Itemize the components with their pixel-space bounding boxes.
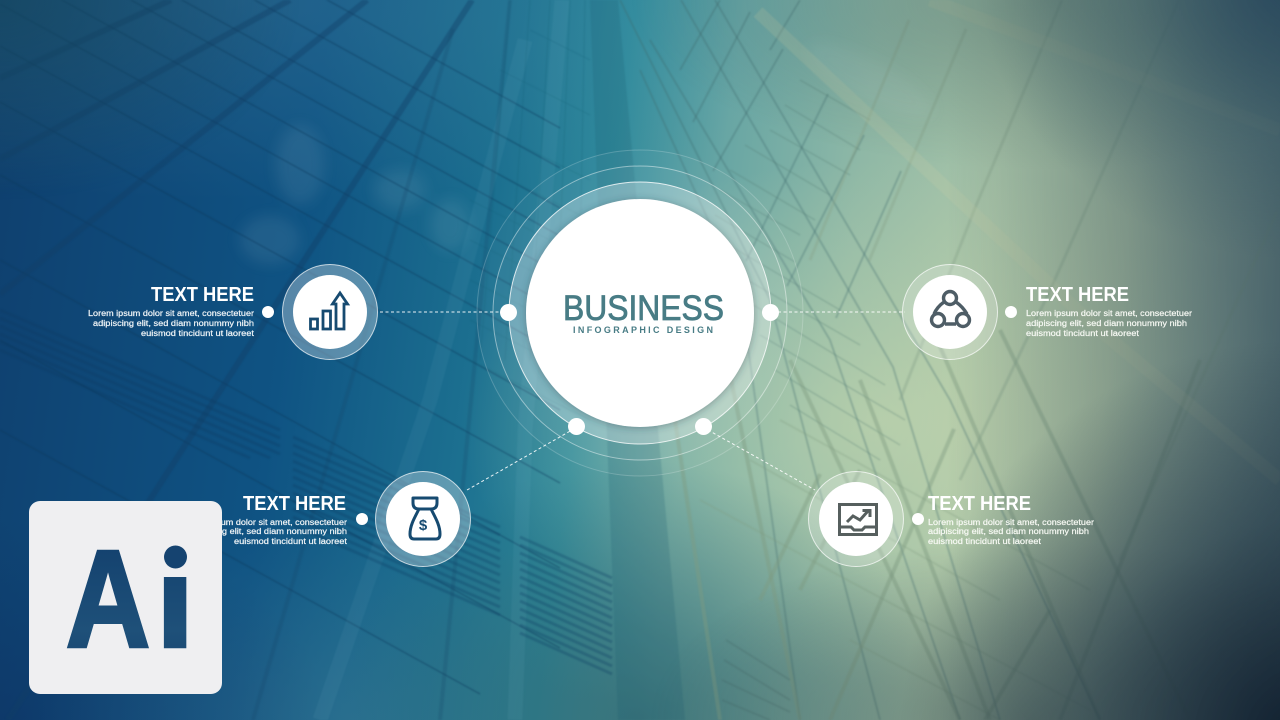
logo letters: A	[66, 522, 150, 676]
item 4 body: adipiscing elit, sed diam nonummy nibh	[1026, 319, 1187, 328]
hub subtitle: INFOGRAPHIC DESIGN	[573, 325, 713, 335]
logo letters: i	[156, 522, 194, 676]
item 3 body: adipiscing elit, sed diam nonummy nibh	[928, 527, 1089, 536]
item 1 body	[88, 309, 255, 338]
left face: window cross lines	[0, 0, 560, 694]
item 1 body: adipiscing elit, sed diam nonummy nibh	[93, 319, 254, 328]
item 2: money bag: $	[419, 517, 428, 534]
item 4 body: euismod tincidunt ut laoreet	[1026, 329, 1140, 338]
item 4 body: Lorem ipsum dolor sit amet, consectetuer	[1026, 309, 1192, 318]
item 4 heading: TEXT HERE	[1026, 284, 1129, 306]
item 4: network	[902, 264, 1192, 360]
item 1 heading: TEXT HERE	[151, 284, 254, 306]
item 3: monitor trend	[808, 472, 1094, 566]
central hub: rings and circle	[477, 150, 803, 476]
item 2 body: Lorem ipsum dolor sit amet, consectetuer	[181, 518, 347, 527]
background: central dark column	[590, 0, 685, 720]
item 1 dot	[262, 306, 274, 318]
icon: three linked circles	[932, 292, 970, 326]
item 4 dot	[1005, 306, 1017, 318]
item 1: growth chart	[88, 264, 378, 360]
item 2 body: adipiscing elit, sed diam nonummy nibh	[186, 527, 347, 536]
logo: Adobe Illustrator badge	[29, 501, 222, 694]
item 2 dot	[356, 513, 368, 525]
left face: light columns	[320, 0, 562, 720]
item 4 body	[1026, 309, 1192, 338]
item 2 heading: TEXT HERE	[243, 493, 346, 515]
item 3 body: Lorem ipsum dolor sit amet, consectetuer	[928, 518, 1094, 527]
item 2: money bag	[181, 472, 470, 566]
item 3 heading: TEXT HERE	[928, 493, 1031, 515]
right face: lower diagonals	[660, 300, 1200, 720]
item 2 body: euismod tincidunt ut laoreet	[234, 537, 348, 546]
item 1 body: Lorem ipsum dolor sit amet, consectetuer	[88, 309, 254, 318]
right face: broad light beams	[758, 0, 1280, 480]
icon: monitor with trend line	[839, 504, 877, 534]
left face: louvre bands	[0, 310, 612, 674]
hub title: BUSINESS	[563, 289, 724, 328]
item 1 body: euismod tincidunt ut laoreet	[141, 329, 255, 338]
louvres lower right	[722, 640, 790, 720]
item 3 body	[928, 518, 1094, 546]
item 3 body: euismod tincidunt ut laoreet	[928, 537, 1042, 546]
connectors: dashed lines	[380, 312, 905, 490]
hub connector dots	[500, 304, 779, 435]
left face: thick mullions	[0, 0, 472, 720]
item 2 body	[181, 518, 348, 546]
item 3 dot	[912, 513, 924, 525]
right face: upper mullions	[810, 0, 1277, 560]
icon: money bag	[410, 498, 440, 539]
icon: bar chart with arrow	[310, 293, 348, 329]
right face: fine mesh	[620, 0, 1100, 720]
centre: fine mesh by the column	[470, 0, 590, 420]
